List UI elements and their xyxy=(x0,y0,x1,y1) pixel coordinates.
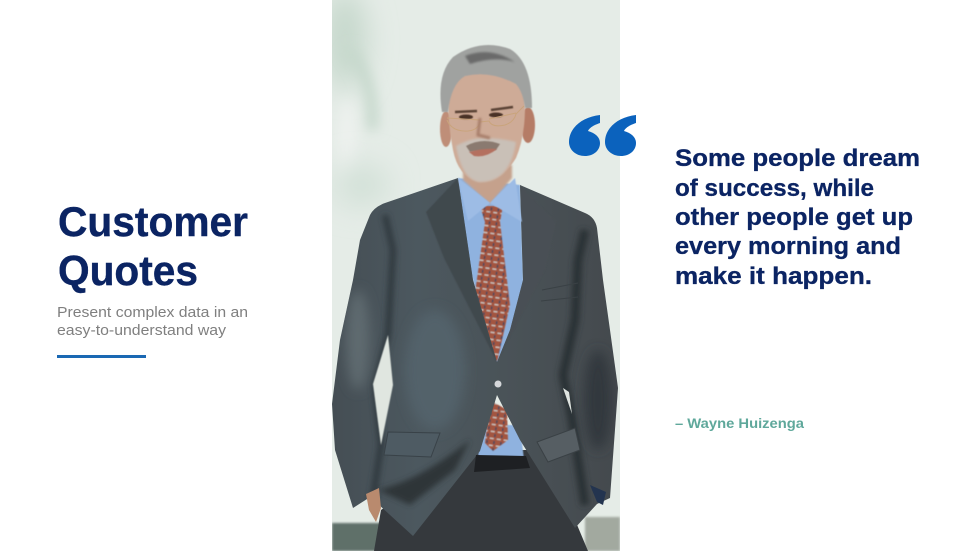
shirt collar xyxy=(458,178,522,222)
heading: Customer xyxy=(58,198,248,245)
accent bar xyxy=(57,355,146,358)
quote text xyxy=(675,145,920,290)
left arm gap xyxy=(373,335,393,445)
shirt xyxy=(458,178,524,460)
hair xyxy=(440,45,532,112)
belt xyxy=(474,455,530,472)
hand xyxy=(366,488,381,522)
jacket xyxy=(332,178,618,536)
photo: man in grey suit xyxy=(323,0,620,551)
right cuff xyxy=(590,485,606,505)
head xyxy=(440,45,535,182)
quote text: of success, while xyxy=(675,175,874,202)
moustache and mouth xyxy=(466,141,500,152)
quote text: other people get up xyxy=(675,204,913,231)
glasses xyxy=(447,106,524,131)
quote text: every morning and xyxy=(675,233,901,260)
icon: quotation marks xyxy=(569,115,636,156)
right arm gap xyxy=(563,388,572,414)
heading: Quotes xyxy=(58,247,198,294)
subtitle: easy-to-understand way xyxy=(57,322,227,339)
heading xyxy=(58,198,248,294)
nose xyxy=(478,118,490,138)
quote text: Some people dream xyxy=(675,145,920,172)
neck xyxy=(463,165,512,204)
tie xyxy=(474,206,510,451)
trousers xyxy=(374,450,588,551)
photo backdrop xyxy=(323,0,620,551)
eyes and brows xyxy=(455,107,513,112)
attribution: – Wayne Huizenga xyxy=(675,415,804,431)
quote text: make it happen. xyxy=(675,263,872,290)
subtitle xyxy=(57,304,248,339)
subtitle: Present complex data in an xyxy=(57,304,248,321)
jacket button xyxy=(494,380,502,388)
